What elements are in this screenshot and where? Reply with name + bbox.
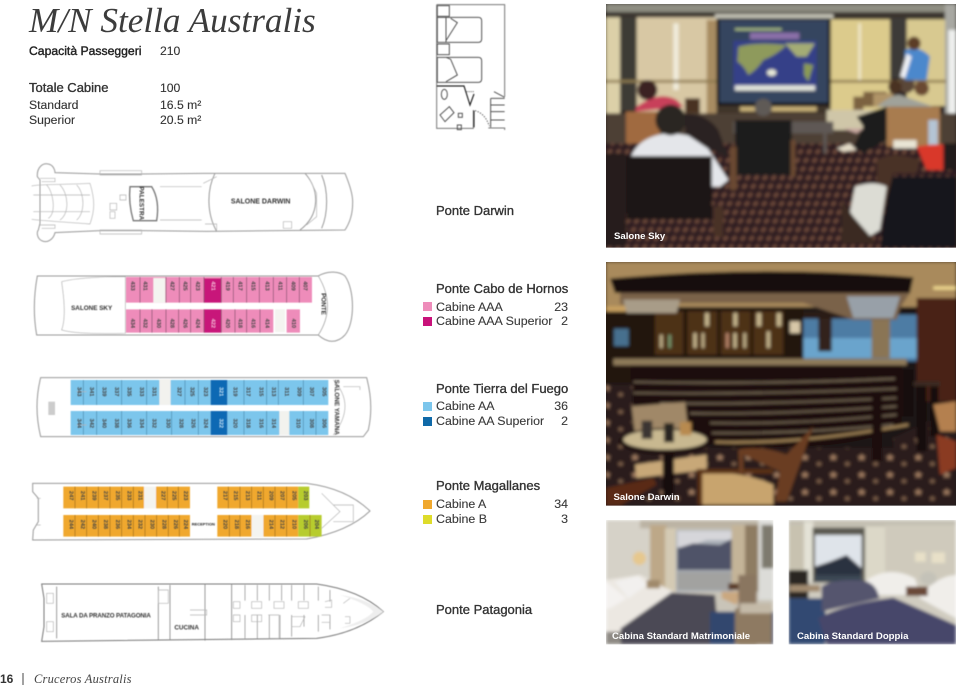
deck plan: Ponte Tierra del Fuego: 318 (245, 419, 251, 428)
deck plan: Ponte Tierra del Fuego: 337 (113, 387, 119, 396)
deck heading: Ponte Darwin: Ponte Darwin (436, 203, 514, 218)
deck plan: Ponte Tierra del Fuego: 341 (88, 387, 94, 396)
deck plan: Ponte Magallanes: 224 (182, 520, 188, 530)
deck plan: Ponte Tierra del Fuego: 330 (165, 419, 171, 428)
deck plan: Ponte Cabo de Hornos: PONTE (320, 293, 327, 315)
deck plan: Ponte Magallanes: 234 (125, 520, 131, 530)
deck plan: Ponte Tierra del Fuego: 311 (283, 387, 289, 396)
deck plan: Ponte Tierra del Fuego: 319 (231, 387, 237, 396)
deck plan: Ponte Magallanes: 210 (291, 520, 297, 529)
deck plan: Ponte Tierra del Fuego: 335 (125, 387, 131, 396)
legend: Ponte Cabo de Hornos: 23 (554, 300, 568, 314)
legend: Ponte Tierra del Fuego: Ponte Tierra del Fuego (436, 381, 568, 396)
ship statistics (29, 44, 201, 127)
deck plan: Ponte Cabo de Hornos: 431 (142, 281, 148, 291)
deck plan: Ponte Tierra del Fuego: 325 (189, 387, 195, 396)
ship statistics: Superior (29, 113, 75, 127)
deck plan: Ponte Tierra del Fuego: 313 (270, 387, 276, 396)
deck plan: Ponte Darwin: PALESTRA (137, 187, 144, 221)
deck plan: Ponte Cabo de Hornos: 424 (194, 319, 200, 329)
deck plan: Ponte Tierra del Fuego: 320 (231, 419, 237, 428)
deck plan: Ponte Cabo de Hornos: 409 (289, 281, 295, 291)
deck plan: Ponte Magallanes: 207 (279, 491, 285, 500)
deck plan: Ponte Magallanes: 225 (171, 491, 177, 500)
deck plan: Ponte Magallanes: 217 (221, 491, 227, 500)
deck plan: Ponte Tierra del Fuego: 322 (217, 419, 223, 428)
deck plan: Ponte Cabo de Hornos: 420 (224, 319, 230, 328)
deck plan: Ponte Darwin: SALONE DARWIN (231, 198, 290, 205)
deck plan: Ponte Magallanes: 233 (125, 491, 131, 500)
deck plan: Ponte Tierra del Fuego: 333 (138, 387, 144, 396)
deck plan: Ponte Cabo de Hornos: 410 (290, 319, 296, 328)
deck plan: Ponte Cabo de Hornos: 411 (277, 281, 283, 291)
deck plan: Ponte Magallanes: 209 (267, 491, 273, 500)
deck plan: Ponte Magallanes: 230 (149, 520, 155, 529)
legend: Ponte Tierra del Fuego: 2 (561, 414, 568, 428)
legend: Ponte Magallanes: Cabine A (436, 497, 487, 511)
deck plan: Ponte Magallanes: 211 (255, 491, 261, 500)
photo: Salone Sky (600, 0, 960, 255)
deck plan: Ponte Tierra del Fuego: 342 (88, 419, 94, 428)
deck plan: Ponte Tierra del Fuego: 305 (321, 387, 327, 396)
deck plan: Ponte Cabo de Hornos: SALONE SKY (71, 305, 113, 312)
legend: Ponte Magallanes: Cabine B (436, 512, 487, 526)
deck plan: Ponte Patagonia: SALA DA PRANZO PATAGONIA (61, 613, 151, 620)
deck plan: Ponte Tierra del Fuego: 308 (308, 419, 314, 428)
ship statistics: Totale Cabine (29, 80, 108, 95)
legend: Ponte Cabo de Hornos: 2 (561, 314, 568, 328)
deck plan: Ponte Magallanes: RECEPTION (192, 522, 215, 527)
legend: Ponte Magallanes: 34 (554, 497, 568, 511)
deck plan: Ponte Magallanes: 238 (102, 520, 108, 529)
deck plan: Ponte Magallanes: 205 (291, 491, 297, 500)
deck plan: Ponte Magallanes: 226 (172, 520, 178, 529)
deck plan: Ponte Magallanes: 227 (160, 491, 166, 500)
deck plan: Ponte Magallanes: 223 (182, 491, 188, 500)
deck plan: Ponte Tierra del Fuego: 331 (151, 387, 157, 396)
deck plan: Ponte Tierra del Fuego: 309 (295, 387, 301, 396)
ship statistics: Standard (29, 98, 78, 112)
deck plan: Ponte Tierra del Fuego: 338 (113, 419, 119, 428)
deck plan: Ponte Tierra del Fuego: 334 (138, 419, 144, 429)
deck plan: Ponte Magallanes: 203 (302, 491, 308, 500)
footer: 16 (0, 672, 14, 686)
ship statistics: 100 (160, 81, 181, 95)
deck plan: Ponte Magallanes: 206 (302, 520, 308, 529)
caption: Cabina Standard Matrimoniale: Cabina Standard Matrimoniale (612, 631, 750, 642)
deck plan: Ponte Tierra del Fuego: 307 (308, 387, 314, 396)
deck plan: Ponte Tierra del Fuego: 315 (257, 387, 263, 396)
deck plan: Ponte Cabo de Hornos: 414 (263, 319, 269, 329)
deck plan: Ponte Cabo de Hornos: 417 (237, 281, 243, 291)
deck plan: Ponte Tierra del Fuego: 332 (151, 419, 157, 428)
deck plan: Ponte Tierra del Fuego: 310 (295, 419, 301, 428)
deck plan: Ponte Tierra del Fuego: 326 (190, 419, 196, 428)
deck plan: Ponte Tierra del Fuego: 340 (101, 419, 107, 428)
deck plan: Ponte Cabo de Hornos: 416 (249, 319, 255, 328)
ship statistics: 20.5 m² (160, 113, 201, 127)
legend: Ponte Tierra del Fuego: 36 (554, 399, 568, 413)
deck plan: Ponte Cabo de Hornos: 413 (263, 281, 269, 291)
deck plan: Ponte Magallanes: 247 (67, 491, 73, 500)
legend: Ponte Cabo de Hornos: Cabine AAA Superior (436, 314, 552, 328)
title: M/N Stella Australis (28, 1, 316, 40)
deck plan: Ponte Cabo de Hornos: 432 (142, 319, 148, 328)
deck plan: Ponte Tierra del Fuego: 344 (75, 419, 81, 429)
deck plan: Ponte Tierra del Fuego: 321 (217, 387, 223, 396)
legend: Ponte Cabo de Hornos: Cabine AAA (436, 300, 504, 314)
deck plan: Ponte Tierra del Fuego: 339 (101, 387, 107, 396)
photo: Salone Darwin (600, 258, 960, 513)
deck plan: Ponte Magallanes: 218 (233, 520, 239, 529)
deck plan: Ponte Magallanes: 220 (221, 520, 227, 529)
deck plan: Ponte Cabo de Hornos: 415 (249, 281, 255, 291)
ship statistics: 210 (160, 44, 181, 58)
legend: Ponte Cabo de Hornos (423, 281, 569, 328)
deck plan: Ponte Cabo de Hornos: 425 (181, 281, 187, 291)
deck plan: Ponte Tierra del Fuego: 306 (321, 419, 327, 428)
deck plan: Ponte Darwin (32, 164, 353, 242)
deck plan: Ponte Cabo de Hornos: 428 (169, 319, 175, 328)
deck plan: Ponte Tierra del Fuego: 336 (125, 419, 131, 428)
deck plan: Ponte Magallanes: 228 (161, 520, 167, 529)
deck plan: Ponte Magallanes: 212 (279, 520, 285, 529)
deck plan: Ponte Magallanes: 235 (114, 491, 120, 500)
legend: Ponte Cabo de Hornos: Ponte Cabo de Hornos (436, 281, 569, 296)
deck plan: Ponte Magallanes: 213 (244, 491, 250, 500)
deck plan: Ponte Tierra del Fuego: 316 (257, 419, 263, 428)
deck plan: Ponte Magallanes: 239 (91, 491, 97, 500)
deck plan: Ponte Cabo de Hornos: 433 (129, 281, 135, 291)
deck plan: Ponte Cabo de Hornos: 426 (181, 319, 187, 328)
deck plan: Ponte Magallanes: 214 (267, 520, 273, 530)
deck plan: Ponte Cabo de Hornos: 421 (209, 281, 215, 291)
deck plan: Ponte Tierra del Fuego: 328 (177, 419, 183, 428)
deck plan: Ponte Cabo de Hornos: 427 (169, 281, 175, 291)
caption: Salone Darwin: Salone Darwin (614, 492, 680, 503)
cabin floor plan (437, 5, 505, 130)
photo: Cabina Standard Matrimoniale (606, 520, 773, 645)
deck plan: Ponte Tierra del Fuego: 317 (245, 387, 251, 396)
deck plan: Ponte Magallanes: 231 (137, 491, 143, 500)
deck heading: Ponte Patagonia: Ponte Patagonia (436, 602, 533, 617)
deck plan: Ponte Cabo de Hornos: 407 (301, 281, 307, 291)
deck plan: Ponte Magallanes: 242 (79, 520, 85, 529)
photo: Cabina Standard Doppia (789, 520, 956, 644)
deck plan: Ponte Tierra del Fuego: 323 (202, 387, 208, 396)
deck plan: Ponte Magallanes: 232 (137, 520, 143, 529)
legend: Ponte Magallanes: Ponte Magallanes (436, 478, 541, 493)
deck plan: Ponte Magallanes: 240 (91, 520, 97, 529)
deck plan: Ponte Magallanes: 215 (232, 491, 238, 500)
deck plan: Ponte Magallanes: 216 (244, 520, 250, 529)
deck plan: Ponte Tierra del Fuego: SALONE YAMANA (333, 380, 340, 435)
legend: Ponte Tierra del Fuego (423, 381, 568, 428)
deck plan: Ponte Tierra del Fuego: 314 (270, 419, 276, 429)
deck plan: Ponte Patagonia (42, 584, 383, 641)
deck plan: Ponte Magallanes: 204 (313, 520, 319, 530)
deck plan: Ponte Tierra del Fuego: 324 (202, 419, 208, 429)
deck plan: Ponte Cabo de Hornos: 418 (237, 319, 243, 328)
deck plan: Ponte Tierra del Fuego (37, 378, 371, 437)
ship statistics: Capacità Passeggeri (29, 44, 141, 58)
deck plan: Ponte Cabo de Hornos: 419 (224, 281, 230, 291)
caption: Salone Sky: Salone Sky (614, 231, 666, 242)
deck plan: Ponte Magallanes: 241 (79, 491, 85, 500)
footer: Cruceros Australis (34, 672, 132, 686)
deck plan: Ponte Tierra del Fuego: 343 (75, 387, 81, 396)
ship statistics: 16.5 m² (160, 98, 201, 112)
deck plan: Ponte Magallanes (33, 483, 370, 540)
deck plan: Ponte Cabo de Hornos (34, 272, 352, 341)
deck plan: Ponte Cabo de Hornos: 430 (155, 319, 161, 328)
deck plan: Ponte Magallanes: 244 (67, 520, 73, 530)
deck plan: Ponte Patagonia: CUCINA (174, 624, 199, 631)
legend: Ponte Tierra del Fuego: Cabine AA (436, 399, 495, 413)
deck plan: Ponte Magallanes: 237 (102, 491, 108, 500)
deck plan: Ponte Cabo de Hornos: 422 (209, 319, 215, 328)
caption: Cabina Standard Doppia: Cabina Standard Doppia (797, 631, 909, 642)
deck plan: Ponte Cabo de Hornos: 423 (194, 281, 200, 291)
deck plan: Ponte Cabo de Hornos: 434 (129, 319, 135, 329)
legend: Ponte Magallanes (423, 478, 568, 526)
deck plan: Ponte Magallanes: 236 (114, 520, 120, 529)
legend: Ponte Tierra del Fuego: Cabine AA Superior (436, 414, 544, 428)
legend: Ponte Magallanes: 3 (561, 512, 568, 526)
deck plan: Ponte Tierra del Fuego: 327 (175, 387, 181, 396)
